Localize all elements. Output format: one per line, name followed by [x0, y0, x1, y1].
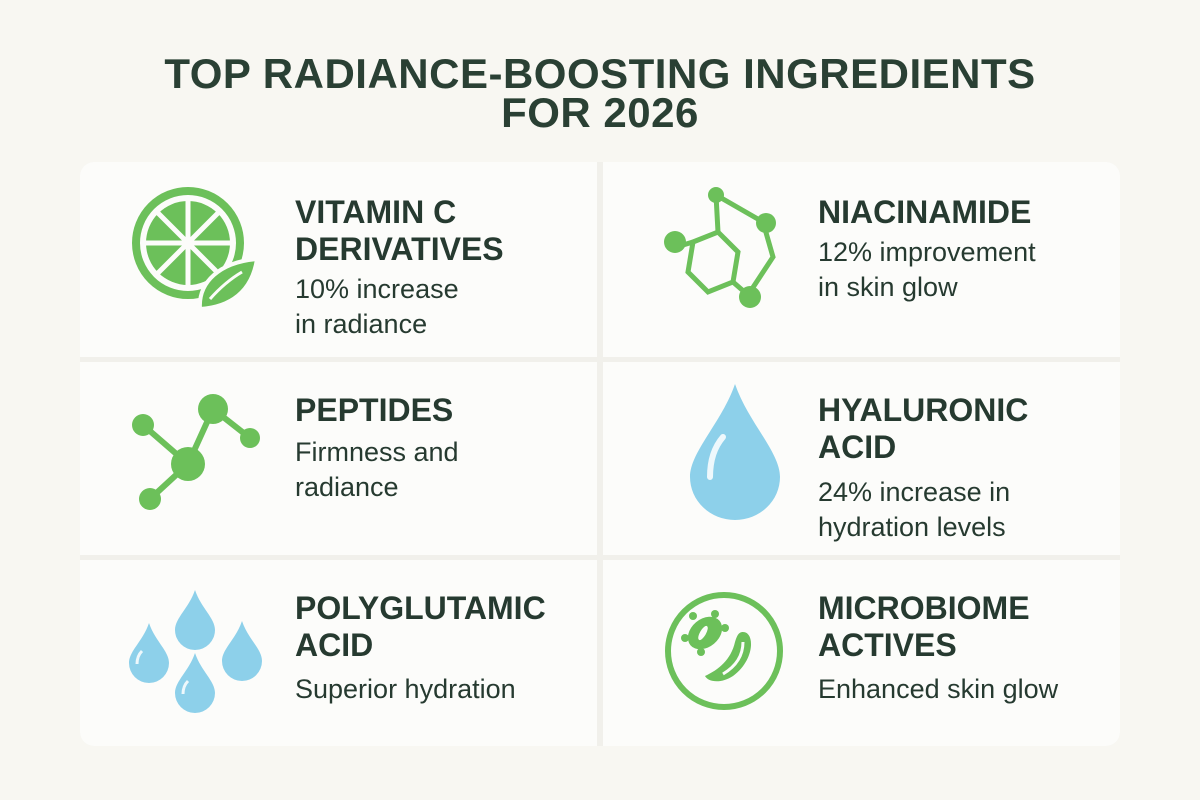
- description: radiance: [295, 472, 399, 502]
- description: in radiance: [295, 309, 427, 339]
- heading: VITAMIN C: [295, 194, 456, 230]
- description: [818, 237, 1036, 302]
- description: 10% increase: [295, 274, 459, 304]
- icon: lime with leaf: [132, 187, 255, 307]
- description: 24% increase in: [818, 477, 1010, 507]
- heading: [818, 392, 1028, 465]
- heading: NIACINAMIDE: [818, 194, 1031, 230]
- description: 12% improvement: [818, 237, 1036, 267]
- icon: peptide chain: [132, 394, 260, 510]
- description: [295, 437, 459, 502]
- description: in skin glow: [818, 272, 958, 302]
- cell: polyglutamic acid: [80, 560, 597, 746]
- icon: hexagon molecule: [664, 187, 776, 308]
- cell: hyaluronic acid: [603, 362, 1120, 555]
- heading: ACID: [818, 429, 896, 465]
- heading: [818, 590, 1030, 663]
- heading: ACTIVES: [818, 627, 957, 663]
- panel: ingredients grid: [80, 162, 1120, 746]
- icon: microbes in circle: [665, 592, 783, 710]
- title: [164, 50, 1036, 136]
- heading: [295, 194, 504, 267]
- description: Superior hydration: [295, 674, 516, 704]
- cell: vitamin c: [80, 162, 597, 357]
- heading: HYALURONIC: [818, 392, 1028, 428]
- icon: water drops: [129, 590, 262, 713]
- title: TOP RADIANCE-BOOSTING INGREDIENTS: [164, 50, 1036, 97]
- heading: POLYGLUTAMIC: [295, 590, 546, 626]
- description: [295, 274, 459, 339]
- heading: DERIVATIVES: [295, 231, 504, 267]
- description: Enhanced skin glow: [818, 674, 1058, 704]
- heading: ACID: [295, 627, 373, 663]
- description: Firmness and: [295, 437, 459, 467]
- description: hydration levels: [818, 512, 1006, 542]
- cell: niacinamide: [603, 162, 1120, 357]
- description: [818, 477, 1010, 542]
- icon: water drop: [690, 384, 780, 520]
- heading: PEPTIDES: [295, 392, 453, 428]
- cell: microbiome actives: [603, 560, 1120, 746]
- cell: peptides: [80, 362, 597, 555]
- heading: [295, 590, 546, 663]
- title: FOR 2026: [501, 89, 699, 136]
- heading: MICROBIOME: [818, 590, 1030, 626]
